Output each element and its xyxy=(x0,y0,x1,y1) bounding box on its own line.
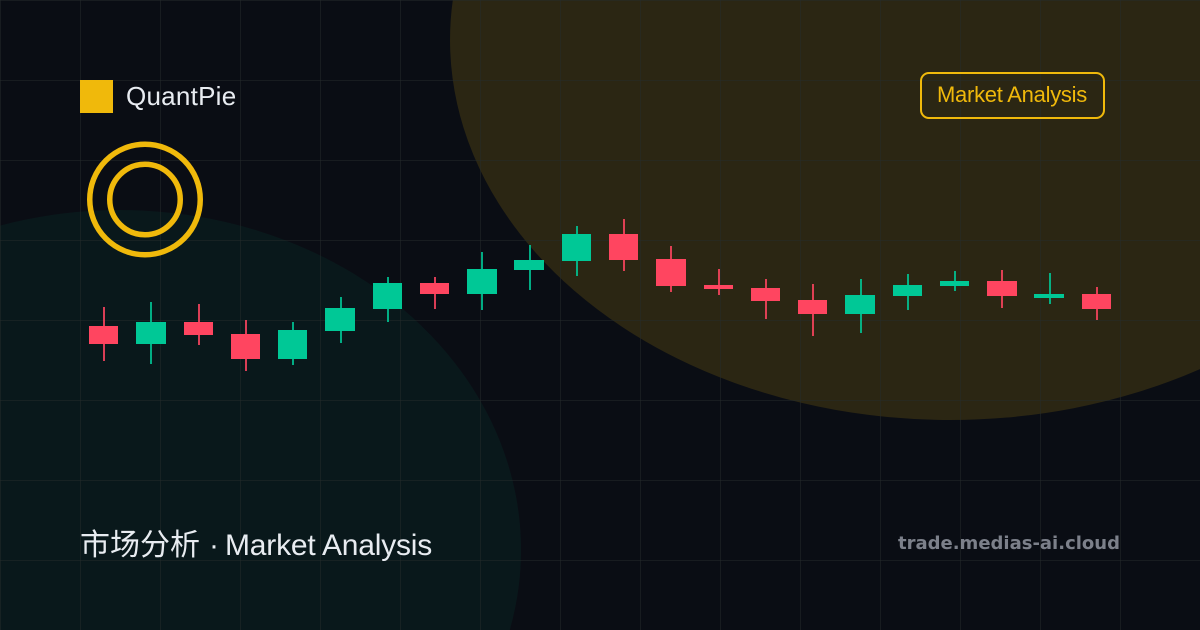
caption: 市场分析 xyxy=(80,529,200,562)
badge: Market Analysis: Market Analysis xyxy=(937,82,1087,107)
caption: · xyxy=(209,529,219,562)
logo xyxy=(80,80,236,113)
badge: Market Analysis xyxy=(921,73,1104,118)
caption: Market Analysis xyxy=(225,529,432,562)
site url: trade.medias-ai.cloud xyxy=(898,533,1120,554)
background blob: gold xyxy=(450,0,1200,420)
candlestick chart xyxy=(89,219,1111,371)
background blob: teal xyxy=(0,210,521,630)
logo mark xyxy=(80,80,113,113)
icon: concentric rings xyxy=(90,144,200,255)
brand name: QuantPie xyxy=(126,81,236,111)
